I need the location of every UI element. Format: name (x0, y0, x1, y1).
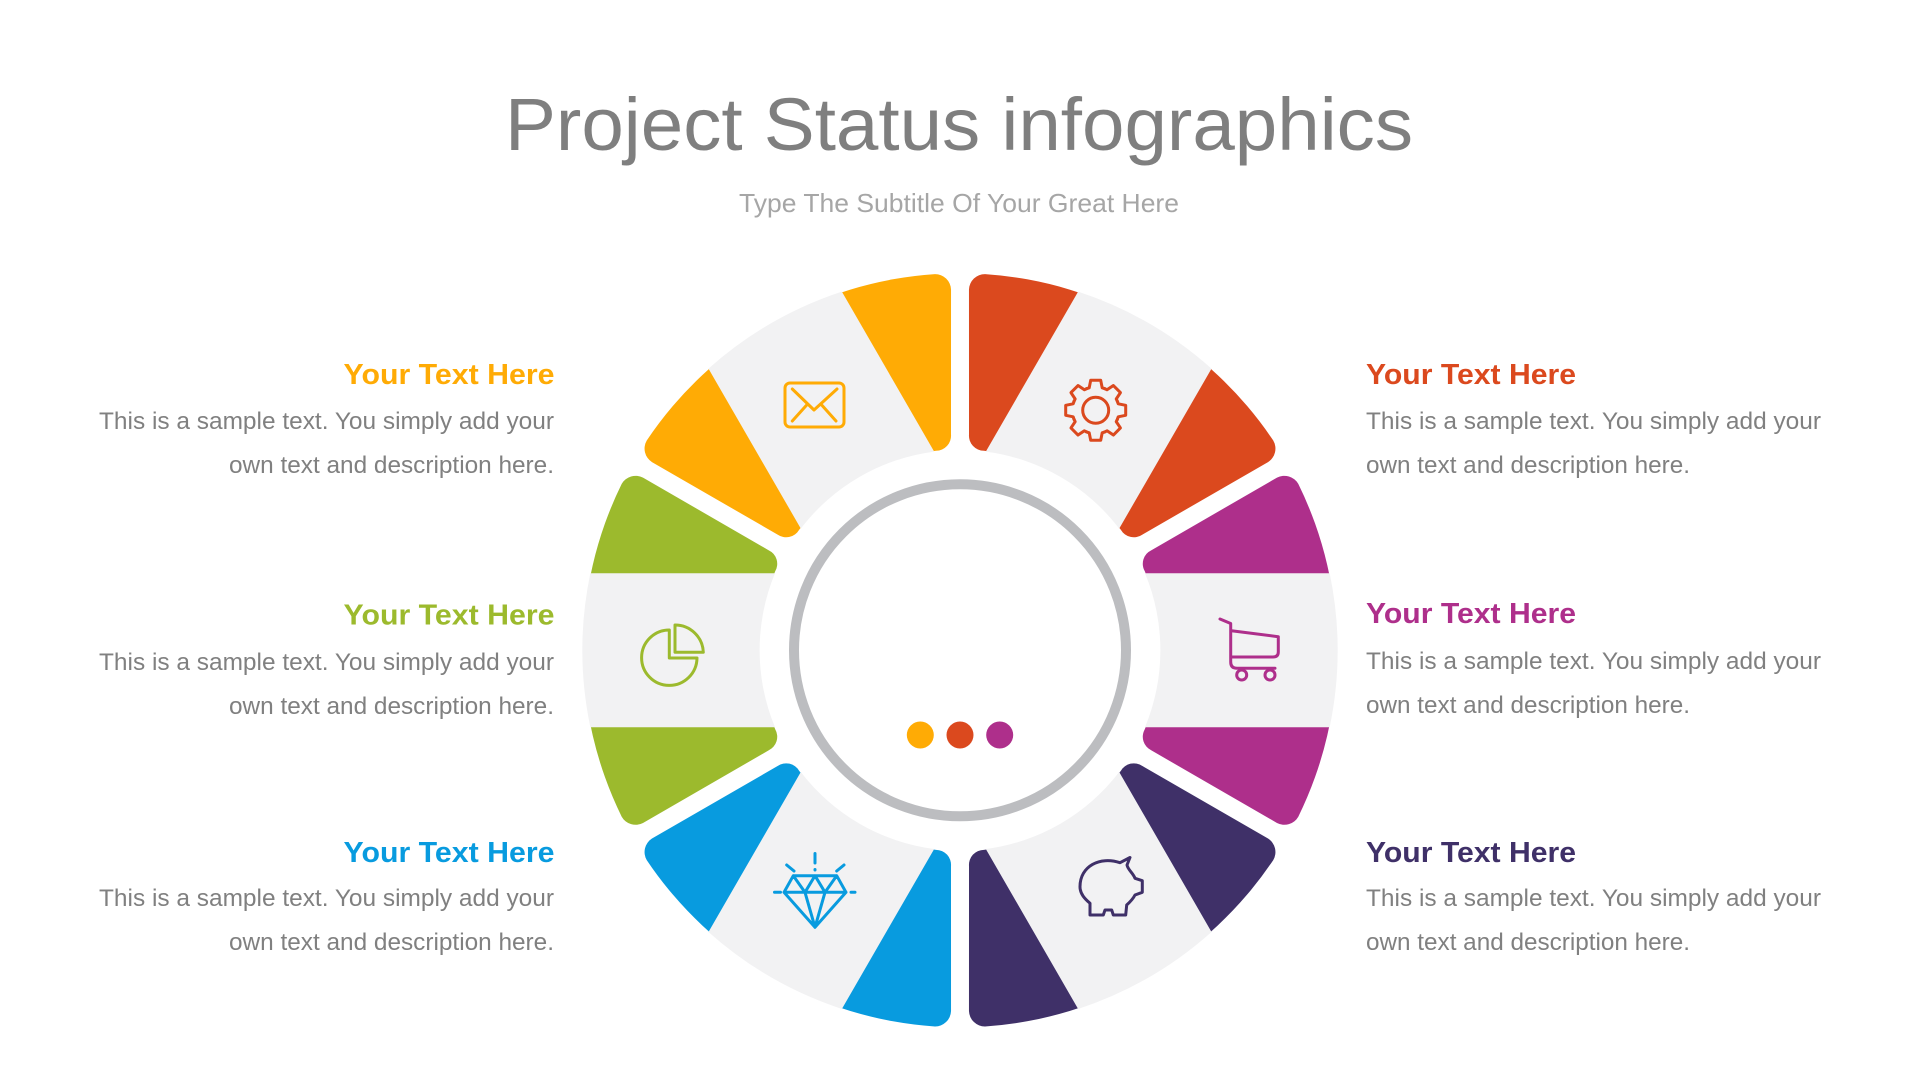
text block: green (99, 600, 554, 720)
text block: red: own text and description here. (1366, 452, 1690, 479)
text block: orange: Your Text Here (344, 359, 554, 391)
icon: gear (1066, 380, 1126, 440)
text block: purple (1366, 598, 1821, 719)
text block: purple: Your Text Here (1366, 598, 1576, 630)
segment: blue diamond (620, 721, 1020, 1064)
text block: navy: Your Text Here (1366, 837, 1576, 869)
text block: red: This is a sample text. You simply add your (1366, 408, 1821, 435)
text block: blue: Your Text Here (344, 837, 554, 869)
title: Project Status infographics (505, 83, 1413, 166)
text block: orange (99, 359, 554, 479)
icon: shopping cart (1220, 619, 1278, 680)
text block: green: Your Text Here (344, 600, 554, 632)
text block: green: This is a sample text. You simply add your (99, 649, 554, 676)
segment: red gear (900, 237, 1300, 579)
icon: diamond (774, 854, 855, 927)
segment: navy piggy bank (900, 721, 1300, 1064)
text block: blue (99, 837, 554, 956)
icon: envelope (785, 383, 844, 427)
text block: green: own text and description here. (229, 693, 554, 720)
text block: red (1366, 359, 1821, 479)
text block: purple: This is a sample text. You simply add your (1366, 648, 1821, 675)
text block: navy (1366, 837, 1821, 956)
icon: pie chart (642, 625, 703, 685)
text block: blue: own text and description here. (229, 929, 554, 956)
segment: green pie chart (582, 476, 777, 825)
text block: orange: own text and description here. (229, 452, 554, 479)
subtitle: Type The Subtitle Of Your Great Here (739, 188, 1179, 218)
status dots (907, 722, 1013, 748)
icon: piggy bank (1080, 858, 1142, 915)
text block: orange: This is a sample text. You simply add your (99, 408, 554, 435)
text block: purple: own text and description here. (1366, 692, 1690, 719)
centre ring (794, 484, 1126, 816)
text block: navy: own text and description here. (1366, 929, 1690, 956)
text block: navy: This is a sample text. You simply add your (1366, 885, 1821, 912)
text block: red: Your Text Here (1366, 359, 1576, 391)
segment: purple cart (1143, 476, 1338, 825)
segment: orange envelope (620, 237, 1020, 579)
text block: blue: This is a sample text. You simply add your (99, 885, 554, 912)
